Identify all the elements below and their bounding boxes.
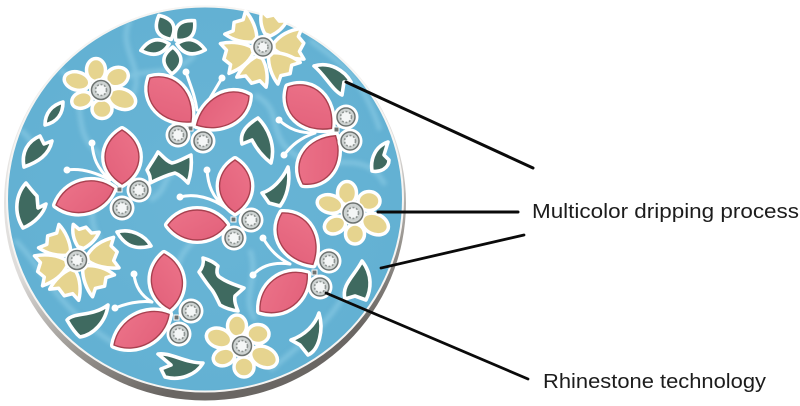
- compact disc: metal rim and blue enamel: [4, 6, 406, 400]
- callout line: to upper leaf: [346, 82, 533, 168]
- callout line: to enamel edge: [381, 235, 524, 268]
- flower: yellow round petals, right: [315, 182, 392, 244]
- butterfly: lower left: [107, 252, 204, 358]
- label: rhinestone technology: Rhinestone technology: [543, 371, 766, 393]
- flower: yellow round petals, upper left: [62, 58, 139, 118]
- callout line: to right flower: [378, 210, 518, 214]
- butterfly: top right: [276, 74, 362, 193]
- flower: yellow star petals, top: [219, 10, 305, 88]
- flower: yellow round petals, bottom: [204, 315, 281, 377]
- butterfly: left: [52, 130, 152, 220]
- label: multicolor dripping process: Multicolor dripping process: [532, 201, 799, 223]
- butterfly: centre: [168, 160, 264, 250]
- callout line: to rhinestone: [326, 293, 528, 379]
- butterfly: top centre: [138, 66, 256, 154]
- leaves: green enamel: [17, 65, 389, 378]
- flower: dark green five petals: [139, 12, 207, 74]
- butterfly: lower right: [250, 204, 342, 324]
- flower: yellow star petals, lower left: [34, 223, 120, 301]
